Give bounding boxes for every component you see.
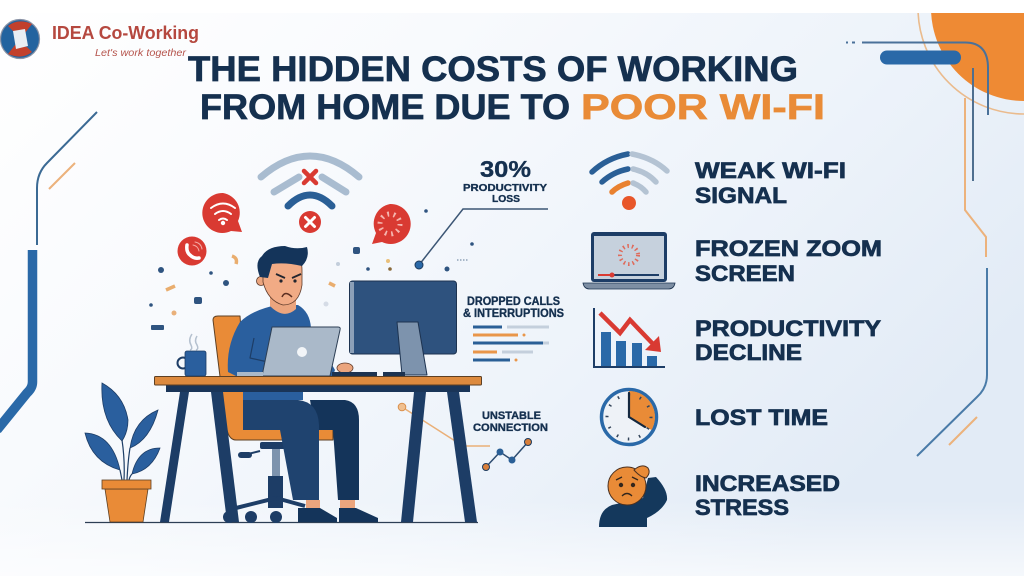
callout: unstable connection	[398, 403, 548, 470]
near leg	[243, 400, 319, 500]
item: increased stress	[599, 466, 840, 527]
arm detail	[250, 338, 268, 362]
item: frozen zoom screen	[583, 232, 882, 289]
icon: red loading bubble	[372, 204, 411, 244]
icon: frozen laptop	[583, 232, 675, 289]
item: productivity decline: DECLINE	[695, 340, 802, 365]
callout: dropped calls and interruptions: & INTERRUPTIONS	[463, 308, 564, 320]
item: weak wi-fi signal: SIGNAL	[695, 183, 787, 208]
icon: stressed person	[599, 466, 667, 527]
logo name: IDEA Co-Working	[52, 23, 199, 43]
icon: potted plant	[85, 383, 160, 522]
decoration: left lines	[0, 112, 97, 430]
item: productivity decline: PRODUCTIVITY	[695, 316, 881, 341]
item: frozen zoom screen: SCREEN	[695, 261, 795, 286]
keyboard	[332, 372, 377, 376]
callout: unstable connection: CONNECTION	[473, 422, 548, 434]
title: FROM HOME DUE TO	[200, 88, 570, 127]
neck	[270, 296, 296, 314]
icon: red wi-fi bubble	[202, 193, 242, 233]
item: increased stress: STRESS	[695, 495, 789, 520]
torso	[228, 305, 335, 400]
icon: weak wi-fi	[592, 154, 667, 210]
monitor	[350, 281, 456, 375]
logo tagline: Let's work together	[95, 47, 187, 59]
item: increased stress: INCREASED	[695, 471, 840, 496]
title	[188, 50, 825, 127]
bars: interruption lines	[473, 327, 549, 362]
item: lost time: LOST TIME	[695, 405, 828, 430]
feet	[298, 500, 378, 522]
icon: red phone bubble	[178, 236, 206, 266]
item: weak wi-fi signal	[592, 154, 846, 210]
far leg	[310, 400, 359, 500]
title: THE HIDDEN COSTS OF WORKING	[188, 50, 798, 89]
desk	[154, 376, 482, 522]
item: weak wi-fi signal: WEAK WI-FI	[695, 158, 846, 183]
laptop	[237, 327, 340, 376]
logo mark	[0, 20, 40, 58]
ground line	[85, 522, 478, 524]
logo: IDEA Co-Working	[0, 20, 199, 59]
title: POOR WI-FI	[581, 88, 825, 127]
item: productivity decline	[594, 308, 881, 367]
icon: broken wi-fi signal above person	[261, 156, 359, 233]
icon: clock	[602, 390, 656, 444]
hand	[337, 363, 353, 373]
callout: 30% productivity loss	[415, 156, 548, 269]
icon: declining chart	[594, 308, 665, 367]
callout: 30% productivity loss: LOSS	[492, 193, 520, 205]
callout: 30% productivity loss: PRODUCTIVITY	[463, 182, 547, 194]
item: frozen zoom screen: FROZEN ZOOM	[695, 236, 882, 261]
callout: dropped calls and interruptions: DROPPED CALLS	[467, 296, 560, 308]
decoration: top right circle and lines	[846, 0, 1024, 456]
illustration: person at desk	[85, 246, 482, 523]
callout: dropped calls and interruptions	[463, 296, 564, 362]
head	[256, 246, 308, 305]
callout: 30% productivity loss: 30%	[480, 156, 531, 182]
chair	[213, 316, 333, 523]
item: lost time	[602, 390, 828, 444]
callout: unstable connection: UNSTABLE	[482, 410, 541, 422]
icon: coffee mug	[178, 334, 206, 376]
confetti particles	[149, 209, 474, 330]
